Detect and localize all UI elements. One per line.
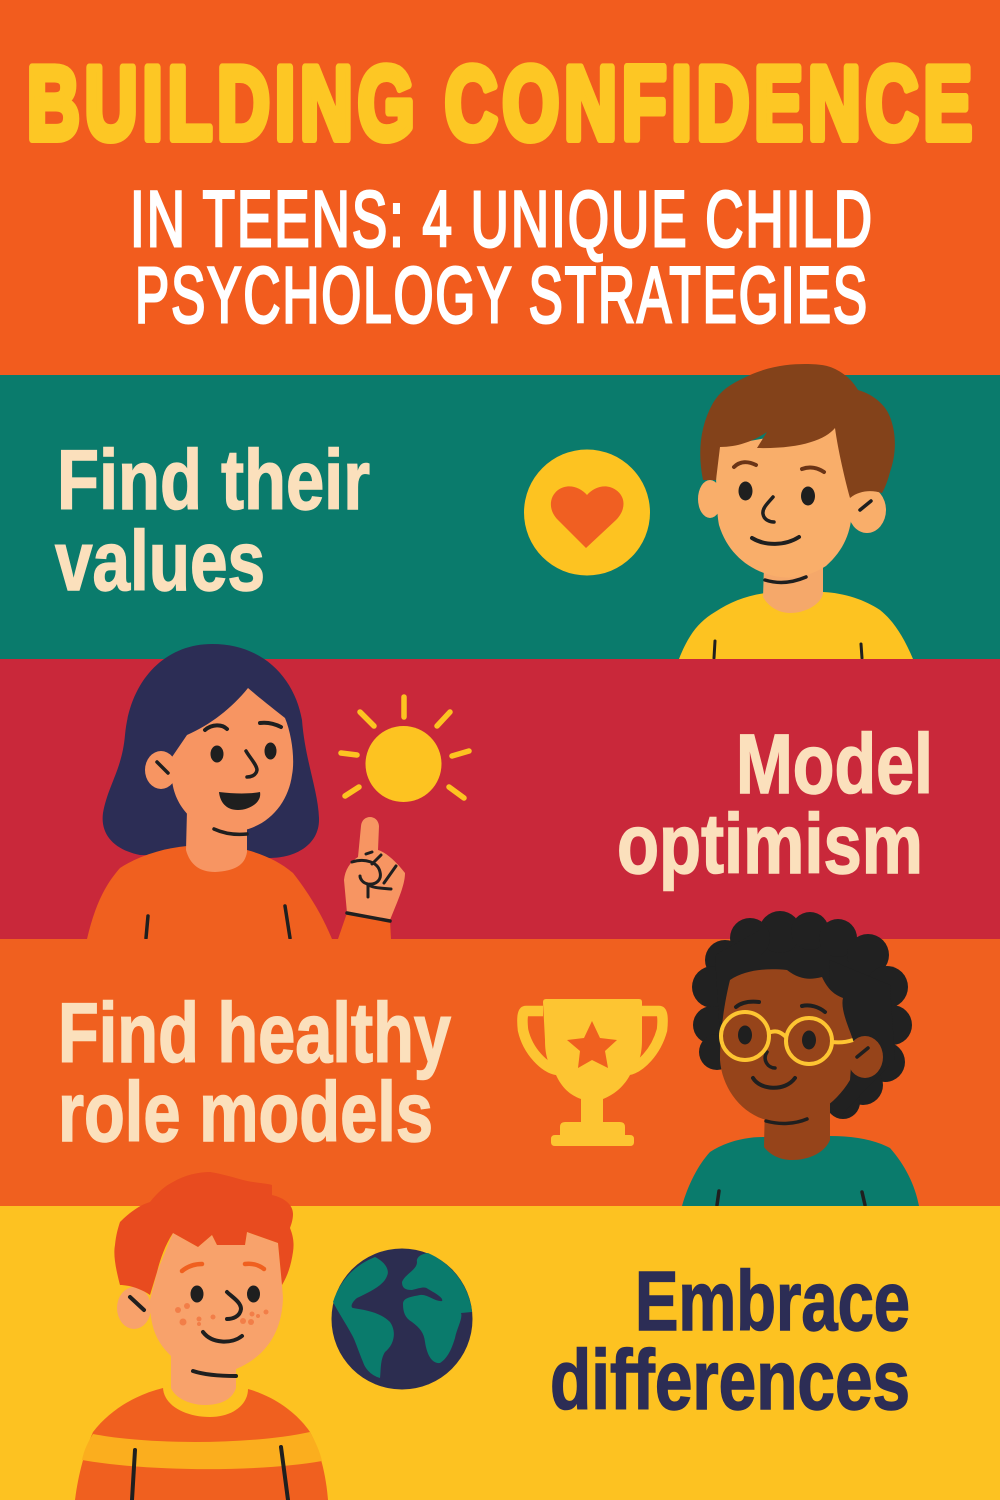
subtitle xyxy=(130,174,874,339)
hand pointing up xyxy=(338,817,405,939)
panel: embrace differences xyxy=(0,1172,1000,1500)
icon: sun xyxy=(341,697,469,802)
heading: find their values: Find their xyxy=(57,433,370,527)
heading: find healthy role models: Find healthy xyxy=(58,986,451,1080)
heading: find healthy role models: role models xyxy=(58,1065,433,1159)
panel: header xyxy=(0,0,1000,376)
heading: find their values: values xyxy=(55,514,265,608)
illustration: boy with red hair and freckles xyxy=(75,1172,328,1500)
heading: find healthy role models xyxy=(58,986,451,1159)
heading: find their values xyxy=(55,433,370,608)
icon: trophy xyxy=(522,999,663,1146)
icon: heart in circle xyxy=(524,450,650,576)
panel: model optimism xyxy=(0,644,1000,940)
heading: model optimism: Model xyxy=(736,717,933,811)
glasses xyxy=(721,1012,853,1064)
illustration: boy with brown hair xyxy=(679,364,913,659)
panel: find healthy role models xyxy=(0,911,1000,1207)
heading: embrace differences: differences xyxy=(550,1333,910,1427)
heading: model optimism xyxy=(617,717,933,891)
heading: embrace differences xyxy=(550,1254,910,1427)
heading: embrace differences: Embrace xyxy=(635,1254,910,1348)
icon: globe xyxy=(332,1248,472,1390)
heading: model optimism: optimism xyxy=(617,797,923,891)
illustration: girl with dark hair pointing xyxy=(87,644,469,939)
illustration: child with curly hair and glasses xyxy=(682,911,919,1206)
panel: find their values xyxy=(0,364,1000,659)
